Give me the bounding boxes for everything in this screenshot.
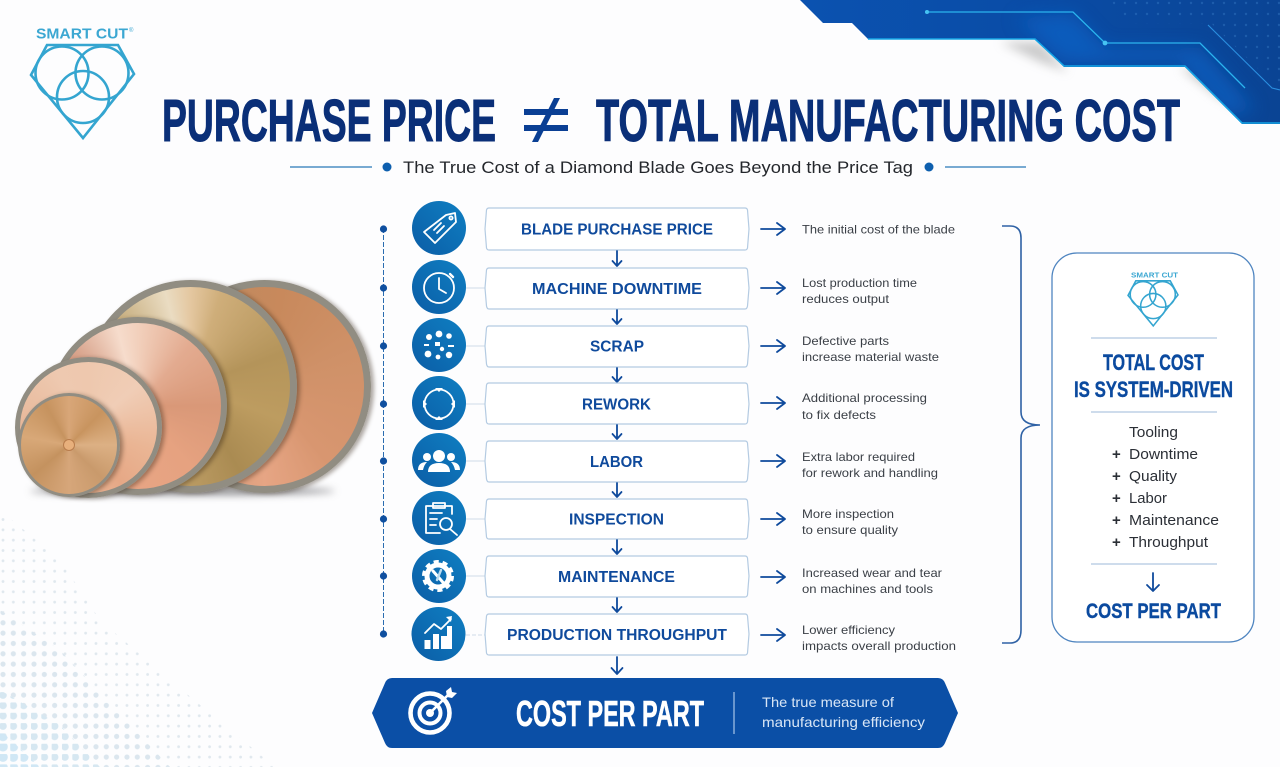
step: blade purchase price: The initial cost of the blade [802, 222, 955, 236]
logo: Smart Cut: ® [129, 27, 134, 34]
timeline rail [380, 225, 387, 638]
panel: total cost is system-driven [1052, 253, 1254, 642]
arrow [612, 483, 622, 497]
brace [1002, 226, 1040, 643]
step: rework: Additional processing [802, 391, 927, 405]
icon: rework cycle [423, 388, 455, 420]
step: maintenance: Increased wear and tear [802, 566, 942, 580]
icon: target [410, 687, 457, 732]
cost list: + [1112, 446, 1121, 463]
halftone dot background [0, 510, 275, 767]
title: PURCHASE PRICE [162, 88, 496, 154]
cost list: + [1112, 468, 1121, 485]
step: blade purchase price [412, 201, 955, 255]
icon: clock [424, 273, 454, 303]
panel heading: IS SYSTEM-DRIVEN [1074, 377, 1233, 402]
logo: Smart Cut [31, 26, 134, 138]
icon: price tag [424, 213, 456, 243]
cost list: + [1112, 490, 1121, 507]
subtitle: The True Cost of a Diamond Blade Goes Beyond the Price Tag [403, 158, 913, 177]
panel heading: TOTAL COST [1103, 350, 1204, 375]
cost list [1112, 424, 1219, 551]
cost list: Maintenance [1129, 512, 1219, 529]
panel: total cost is system-driven: COST PER PART [1086, 600, 1221, 623]
step: labor: LABOR [590, 454, 643, 471]
cost list: Throughput [1129, 534, 1209, 551]
panel heading [1074, 350, 1233, 402]
subtitle [290, 158, 1026, 177]
step: rework: REWORK [582, 396, 652, 414]
arrow [612, 657, 622, 674]
arrow [612, 251, 622, 266]
step: maintenance: on machines and tools [802, 582, 933, 596]
blades illustration [15, 278, 377, 502]
arrow [612, 425, 622, 439]
title [162, 88, 1180, 154]
banner: cost per part: COST PER PART [516, 693, 704, 734]
cost list: Downtime [1129, 446, 1198, 463]
cost list: Labor [1129, 490, 1167, 507]
step: maintenance: MAINTENANCE [558, 569, 675, 586]
icon: team [418, 450, 460, 472]
step: labor: for rework and handling [802, 466, 938, 480]
step: rework [412, 376, 927, 430]
icon: clipboard and magnifier [426, 503, 457, 535]
step: inspection [412, 491, 898, 545]
banner: cost per part: manufacturing efficiency [762, 714, 925, 730]
small logo [1128, 270, 1178, 326]
step: production throughput [412, 607, 956, 661]
cost list: Quality [1129, 468, 1178, 485]
step: production throughput: Lower efficiency [802, 623, 895, 637]
step: inspection: INSPECTION [569, 512, 664, 528]
small logo: SMART CUT [1131, 270, 1178, 280]
cost list: + [1112, 512, 1121, 529]
step: scrap: increase material waste [802, 350, 939, 364]
step: maintenance [412, 549, 942, 603]
banner: cost per part: The true measure of [762, 694, 894, 710]
cost list: Tooling [1129, 424, 1178, 441]
step: machine downtime [412, 260, 917, 314]
step: production throughput: PRODUCTION THROUGHPUT [507, 627, 728, 644]
arrow [612, 540, 622, 554]
not-equal sign [524, 98, 568, 142]
logo: Smart Cut: SMART CUT [36, 26, 128, 42]
step: scrap [412, 318, 939, 372]
step: rework: to fix defects [802, 408, 876, 422]
arrow [612, 310, 622, 324]
top-right circuit banner [800, 0, 1280, 124]
icon: growth chart [424, 616, 452, 649]
icon: scrap pieces [424, 331, 454, 359]
step: blade purchase price: BLADE PURCHASE PRICE [521, 222, 713, 238]
cost list: + [1112, 534, 1121, 551]
arrow [612, 368, 622, 382]
step: labor [412, 433, 938, 487]
step: production throughput: impacts overall production [802, 639, 956, 653]
step: inspection: to ensure quality [802, 523, 898, 537]
step: machine downtime: Lost production time [802, 276, 917, 290]
arrow [1147, 573, 1159, 591]
icon: gear and wrench [424, 562, 452, 590]
step: machine downtime: reduces output [802, 292, 890, 306]
banner: cost per part [372, 678, 958, 748]
step: scrap: SCRAP [590, 338, 644, 356]
step: scrap: Defective parts [802, 334, 889, 348]
step: labor: Extra labor required [802, 450, 915, 464]
step: machine downtime: MACHINE DOWNTIME [532, 281, 702, 298]
step: inspection: More inspection [802, 507, 894, 521]
arrow [612, 598, 622, 612]
